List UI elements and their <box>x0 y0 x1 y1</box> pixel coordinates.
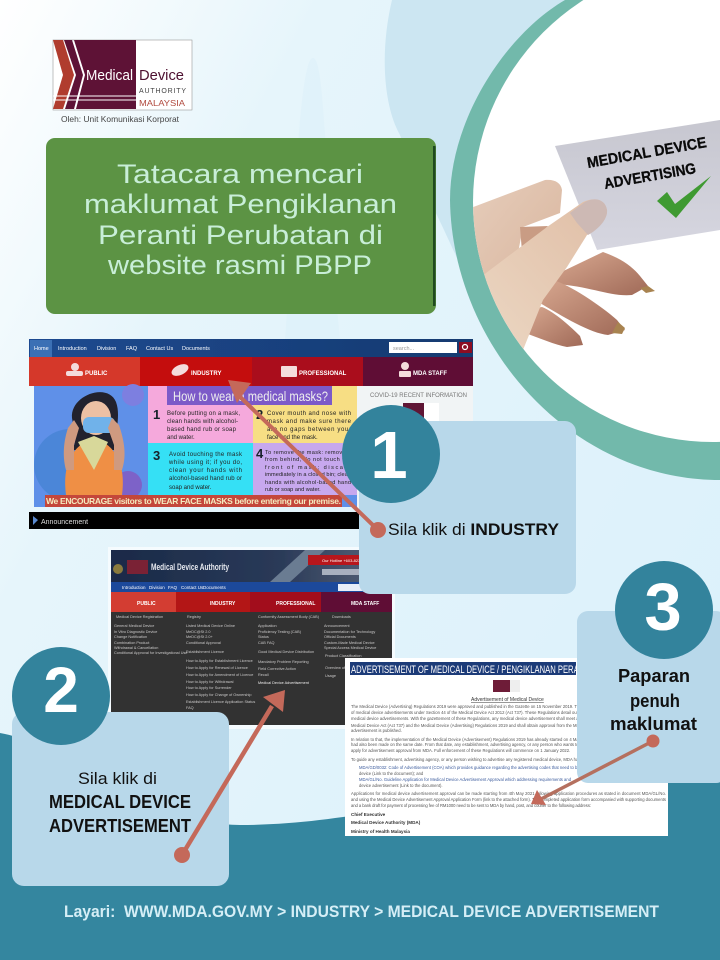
screenshot 2: Industry menu: Proficiency Testing (CAB) <box>258 630 302 634</box>
bottom wave <box>0 733 720 960</box>
screenshot 2: Industry menu: Change Notification <box>114 635 147 639</box>
card text: MEDICAL DEVICE <box>586 134 708 172</box>
screenshot 2: Industry menu: How to Apply for Establishment Licence <box>186 659 253 663</box>
screenshot 2: Industry menu: Field Corrective Action <box>258 667 296 671</box>
arrow 1 <box>228 380 386 538</box>
screenshot 2: Industry menu: How to Apply for Surrender <box>186 686 232 690</box>
screenshot 2: Industry menu: Official Documents <box>324 635 356 639</box>
announcement bar <box>29 512 359 529</box>
screenshot 2: Industry menu: Mandatory Problem Reporting <box>258 660 309 664</box>
category tabs <box>29 357 473 386</box>
screenshot 2: Industry menu: Announcement <box>324 624 350 628</box>
screenshot 3: advertisement page: MDA/GL/No. Guideline Application for Medical Device Advertisement Approval which addressing requirements and <box>359 777 572 782</box>
screenshot 3: advertisement page: MDA/GD/0032: Code of Advertisement (COA) which provides guidance regarding the advertising codes that need to be <box>359 765 580 770</box>
hero banner: mask instructions: We ENCOURAGE visitors to WEAR FACE MASKS before entering our premise. <box>46 496 341 506</box>
announcement bar: Announcement <box>41 519 88 526</box>
lower fingers <box>522 252 655 347</box>
screenshot 2: Industry menu: Listed Medical Device Online <box>186 624 235 628</box>
screenshot 2: Industry menu: Documentation for Technology <box>324 630 375 634</box>
category tabs: PROFESSIONAL <box>299 371 347 377</box>
screenshot 2: Industry menu: Status <box>258 635 269 639</box>
screenshot 2: Industry menu: Contact Us <box>181 585 204 590</box>
arrow 3 <box>531 734 660 805</box>
screenshot 2: Industry menu: FAQ <box>186 706 194 710</box>
screenshot 3: advertisement page: had also been made on the same date. From that date, any establishment, advertising agency, or any person who wants to <box>351 742 579 747</box>
card <box>555 120 720 250</box>
callout text: MEDICAL DEVICE <box>49 792 191 812</box>
screenshot 2: Industry menu: How to Apply for Change of Ownership <box>186 693 251 697</box>
title text <box>84 159 397 280</box>
screenshot 3: advertisement page: To guide any establishment, advertising agency, or any person wishing to advertise any registered medical device, MDA has <box>351 757 580 762</box>
screenshot 3: advertisement page: Applications for medical device advertisement approval can be made starting from 4th May 2021 following application procedures as stated in document MDA/GL/No. <box>351 791 666 796</box>
covid panel: COVID-19 RECENT INFORMATION <box>370 393 467 399</box>
screenshot 2: Industry menu: Application <box>258 624 277 628</box>
arrow 2 <box>174 690 285 863</box>
screenshot 3: advertisement page: advertisement is published. <box>351 728 402 733</box>
hero banner: mask instructions: soap and water. <box>169 485 212 491</box>
callout text: Paparan <box>618 666 690 686</box>
badge 3: 3 <box>644 570 682 645</box>
screenshot 3: advertisement page: apply for advertisement approval from MDA. Full enforcement of these Regulations will commence on 1 January 2022. <box>351 748 570 753</box>
hero banner: mask instructions: front of mask; discard <box>265 465 351 471</box>
hand and thumb <box>468 180 607 350</box>
screenshot 2: Industry menu: How to Apply for Renewal of Licence <box>186 666 248 670</box>
hero banner: mask instructions <box>34 384 357 507</box>
screenshot 2: Industry menu: How to Apply for Withdrawal <box>186 680 234 684</box>
hero banner: mask instructions: and water. <box>167 435 195 441</box>
screenshot 3: advertisement page: Medical Device Authority (MDA) <box>351 820 421 825</box>
top navigation: Introduction <box>58 346 87 352</box>
screenshot 3: advertisement page: Advertisement of Medical Device <box>471 697 544 703</box>
hero banner: mask instructions: 4 <box>256 446 264 461</box>
screenshot 2: Industry menu: Establishment Licence <box>186 650 224 654</box>
callout text: ADVERTISEMENT <box>49 816 191 836</box>
screenshot 2: Industry menu: Overview of Product <box>325 666 360 670</box>
title text: Tatacara mencari <box>117 159 363 189</box>
screenshot 2: Industry menu: PROFESSIONAL <box>276 601 315 607</box>
callout text: Sila klik di INDUSTRY <box>388 520 560 539</box>
hero banner: mask instructions: clean hands with alcohol- <box>167 419 238 425</box>
callout 3 <box>577 561 720 783</box>
hero banner: mask instructions: from behind, do not touch the <box>265 457 351 463</box>
logo: Device <box>139 68 184 84</box>
screenshot 2: Industry menu: Establishment Licence Application Status <box>186 700 255 704</box>
title text: maklumat Pengiklanan <box>84 189 397 219</box>
screenshot 2: Industry menu: Product Classification <box>325 654 362 658</box>
logo <box>53 40 192 110</box>
screenshot 3: advertisement page: Medical Device Act (Act 737) and the Medical Device (Advertising) Regulations 2019 and shall obtain approval from the MDA <box>351 723 583 728</box>
screenshot 2: Industry menu: MeDC@St 2.0 <box>186 630 211 634</box>
screenshot 3: advertisement page: Chief Executive <box>351 812 386 817</box>
screenshot 3: advertisement page: and using the Medical Device Advertisement Approval Application Form (link to the attached form). The completed application form accompanied with supporting documents <box>351 797 666 802</box>
hero banner: mask instructions: while using it; if you do, <box>168 460 242 466</box>
callout 1 <box>342 405 576 594</box>
badge 1 <box>342 405 440 503</box>
footer link: Layari: WWW.MDA.GOV.MY > INDUSTRY > MEDICAL DEVICE ADVERTISEMENT <box>64 903 659 921</box>
category tabs: MDA STAFF <box>413 371 447 377</box>
screenshot 3: advertisement page: In relation to that, the implementation of the Medical Device (Advertisement) Regulations 2019 has already started on 4 May <box>351 737 582 742</box>
screenshot 2: Industry menu: Custom-Made Medical Device <box>324 641 375 645</box>
hero banner: mask instructions: Avoid touching the mask <box>169 452 243 458</box>
badge 2 <box>12 647 110 745</box>
screenshot 2: Industry menu: Division <box>149 585 165 590</box>
screenshot 2: Industry menu: In Vitro Diagnostic Device <box>114 630 157 634</box>
top navigation <box>29 339 473 357</box>
callout text: penuh <box>630 691 680 711</box>
hero banner: mask instructions: hands with alcohol-based hand <box>265 480 351 486</box>
screenshot 3: advertisement page: The Medical Device (Advertising) Regulations 2019 were approved and published in the Gazette on 15 November 2019. The <box>351 704 582 709</box>
screenshot 3: advertisement page: device (Link to the document); and <box>359 771 424 776</box>
screenshot 3: advertisement page: ADVERTISEMENT OF MEDICAL DEVICE / PENGIKLANAN PERANTI <box>351 664 591 676</box>
title text: Peranti Perubatan di <box>98 220 383 250</box>
screenshot 2: Industry menu <box>108 547 395 729</box>
logo: Medical <box>86 68 133 84</box>
screenshot 3: advertisement page: device advertisement (Link to the document). <box>359 783 443 788</box>
screenshot 2: Industry menu: Withdrawal & Cancellation <box>114 646 158 650</box>
screenshot 2: Industry menu: INDUSTRY <box>210 601 236 607</box>
screenshot 2: Industry menu: Conformity Assessment Body (CAB) <box>258 615 320 619</box>
illustration: woman with mask <box>64 392 125 495</box>
screenshot 2: Industry menu: Medical Device Advertisement <box>258 681 310 685</box>
icon: check mark <box>657 176 711 218</box>
screenshot 2: Industry menu: PUBLIC <box>137 601 156 607</box>
screenshot 3: advertisement page: and a bank draft for payment of processing fee of RM1000 need to be sent to MDA by hand, post, and courier to the following address: <box>351 803 591 808</box>
hero banner: mask instructions: based hand rub or soap <box>167 427 237 433</box>
hero banner: mask instructions: To remove the mask: remove it <box>265 450 351 456</box>
category tabs: INDUSTRY <box>191 371 221 377</box>
screenshot 2: Industry menu: General Medical Device <box>114 624 154 628</box>
screenshot 3: advertisement page: Ministry of Health Malaysia <box>351 829 410 834</box>
screenshot 2: Industry menu: Usage <box>325 674 336 678</box>
title text: website rasmi PBPP <box>107 250 372 280</box>
top navigation: Home <box>34 346 49 352</box>
badge 2: 2 <box>43 654 79 726</box>
callout text <box>49 769 191 836</box>
hero banner: mask instructions: Before putting on a mask, <box>167 411 240 417</box>
hero banner: mask instructions: Cover mouth and nose with <box>267 411 351 417</box>
screenshot 3: advertisement page: of medical device advertisements under Section 44 of the Medical Device Act 2012 (Act 737). These Regulations detail out <box>351 710 579 715</box>
hero banner: mask instructions: alcohol-based hand rub or <box>169 476 242 482</box>
hero banner: mask instructions: are no gaps between your <box>267 427 351 433</box>
screenshot 2: Industry menu: MeDC@St 2.0+ <box>186 635 214 639</box>
callout text: Sila klik di <box>78 769 157 788</box>
hero banner: mask instructions: 1 <box>153 407 160 422</box>
photo: hand holding card <box>468 120 720 350</box>
card text: ADVERTISING <box>603 160 697 193</box>
screenshot 2: Industry menu: Good Medical Device Distribution <box>258 650 314 654</box>
title panel <box>46 138 436 314</box>
hero banner: mask instructions: rub or soap and water. <box>265 487 321 493</box>
screenshot 2: Industry menu: Conditional Approval <box>186 641 221 645</box>
top navigation: Division <box>97 346 116 352</box>
screenshot 2: Industry menu: Special Access Medical Device <box>324 646 376 650</box>
screenshot 1: MDA homepage <box>29 339 473 529</box>
screenshot 2: Industry menu: Conditional Approval for Investigational Use <box>114 651 187 655</box>
screenshot 2: Industry menu: MDA STAFF <box>351 601 379 607</box>
screenshot 2: Industry menu: Registry <box>187 615 201 619</box>
screenshot 2: Industry menu: FAQ <box>168 585 178 590</box>
top navigation: Documents <box>182 346 210 352</box>
category tabs: PUBLIC <box>85 371 108 377</box>
covid panel <box>357 386 473 508</box>
screenshot 2: Industry menu: How to Apply for Amendment of Licence <box>186 673 253 677</box>
hero banner: mask instructions: How to wear a medical masks? <box>173 388 328 404</box>
screenshot 2: Industry menu: Medical Device Authority <box>151 562 229 573</box>
top navigation: search... <box>393 346 415 352</box>
screenshot 2: Industry menu: Combination Product <box>114 641 150 645</box>
top navigation: FAQ <box>126 346 138 352</box>
callout text: maklumat <box>610 714 697 734</box>
hero banner: mask instructions: mask and make sure there <box>267 419 352 425</box>
screenshot 2: Industry menu: Introduction <box>122 585 146 590</box>
screenshot 2: Industry menu: Downloads <box>332 615 351 619</box>
card text <box>587 136 707 190</box>
screenshot 2: Industry menu: CAB FAQ <box>258 641 275 645</box>
top navigation: Contact Us <box>146 346 173 352</box>
screenshot 2: Industry menu: Documents <box>203 585 227 590</box>
callout 2 <box>12 647 229 886</box>
hero banner: mask instructions: face and the mask. <box>267 435 318 441</box>
screenshot 3: advertisement page: medical device advertisements. With the gazettement of these Regulations, any medical device advertisement shall meet all <box>351 716 581 721</box>
logo: AUTHORITY <box>139 88 186 95</box>
hero banner: mask instructions: immediately in a closed bin; clean <box>265 472 351 478</box>
hero banner: mask instructions: 3 <box>153 448 160 463</box>
hero banner: mask instructions: clean your hands with <box>169 468 242 474</box>
teal ring with photo <box>450 0 720 480</box>
screenshot 2: Industry menu: Medical Device Registration <box>116 615 163 619</box>
callout text <box>610 666 697 734</box>
badge 3 <box>615 561 713 659</box>
badge 1: 1 <box>370 418 408 493</box>
hero banner: mask instructions: 2 <box>256 407 263 422</box>
screenshot 2: Industry menu: Recall <box>258 673 269 677</box>
screenshot 2: Industry menu: Our Hotline +603-8230 0300 <box>322 558 373 563</box>
credit line: Oleh: Unit Komunikasi Korporat <box>61 114 180 124</box>
screenshot 3: advertisement page <box>345 658 668 836</box>
logo: MALAYSIA <box>139 99 186 108</box>
